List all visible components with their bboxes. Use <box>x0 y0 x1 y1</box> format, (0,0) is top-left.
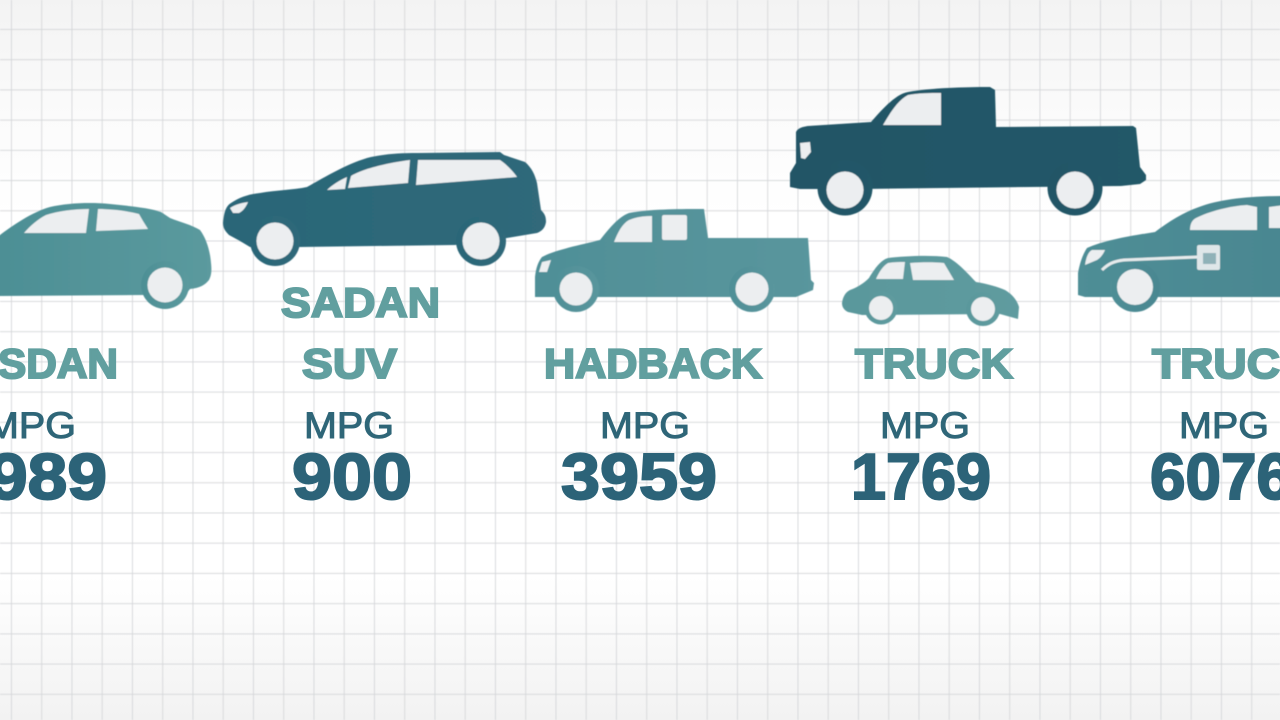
label: mpg suv: MPG <box>304 405 394 446</box>
label: truck: TRUCK <box>855 340 1013 387</box>
icon: sedan left, cropped <box>0 203 211 309</box>
icon: suv <box>223 152 546 266</box>
label: mpg hadback: MPG <box>600 405 690 446</box>
label: mpg truck: MPG <box>880 405 970 446</box>
label: sadan above suv: SADAN <box>281 279 440 326</box>
label: sedan left: SDAN <box>0 340 118 387</box>
icon: electric car right, cropped <box>1078 196 1280 312</box>
icon: small compact car <box>842 256 1019 326</box>
label: mpg right: MPG <box>1179 405 1269 446</box>
icon: large pickup truck <box>790 87 1146 216</box>
value: 1769: 1769 <box>851 440 991 513</box>
label: hadback: HADBACK <box>544 340 762 387</box>
value: 3959: 3959 <box>561 440 717 513</box>
value: 900: 900 <box>292 440 412 513</box>
label: suv: SUV <box>302 340 397 387</box>
label: truck right, cropped: TRUC <box>1152 340 1280 387</box>
icon: hatchback shown as small pickup <box>535 209 814 312</box>
